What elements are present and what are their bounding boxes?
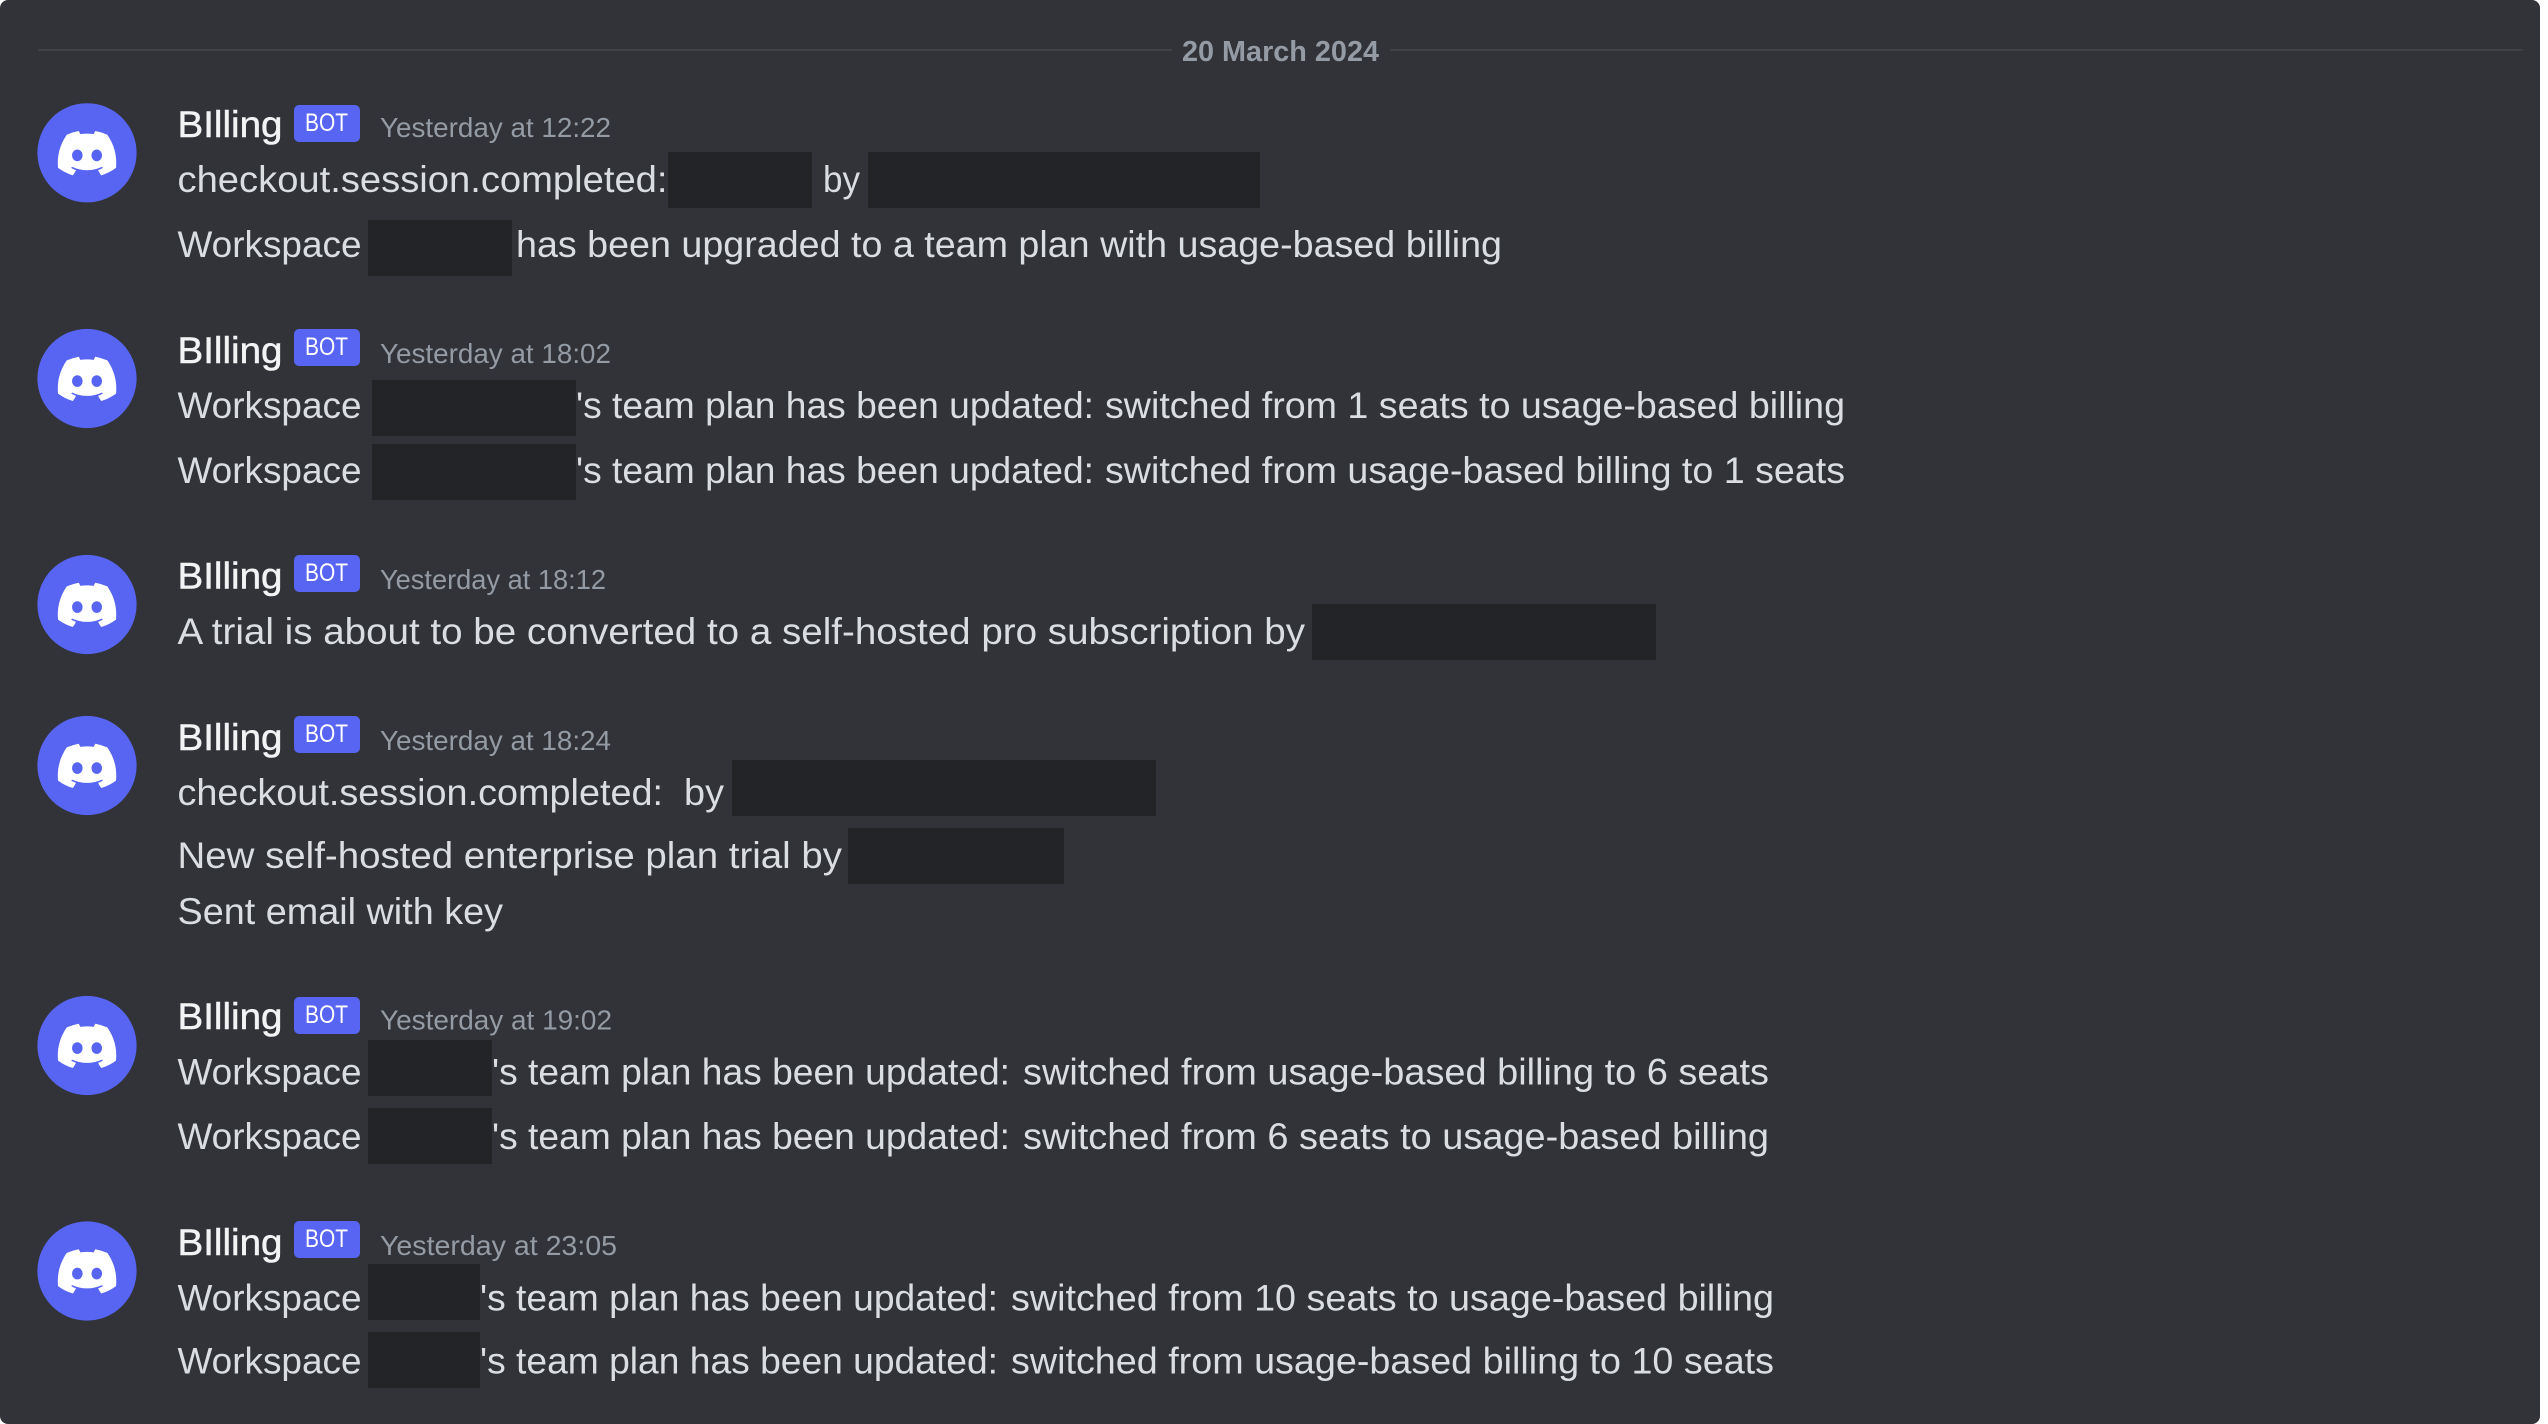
message text line 2: 's team plan has been updated:	[576, 450, 1094, 491]
timestamp: Yesterday at 12:22	[380, 112, 611, 143]
bot badge	[294, 1221, 360, 1258]
bot badge: BOT	[305, 333, 348, 361]
message text line 2: Workspace	[178, 1116, 362, 1157]
bot badge	[294, 555, 360, 592]
message 2	[37, 329, 1845, 500]
message 6	[37, 1221, 1774, 1388]
message text line 2	[178, 220, 1502, 276]
message text line 1	[178, 380, 1845, 436]
message text line 2: 's team plan has been updated:	[492, 1116, 1010, 1157]
message 3	[37, 555, 1656, 660]
sender name: BIlling	[178, 717, 282, 758]
timestamp: Yesterday at 18:02	[380, 338, 611, 369]
bot badge	[294, 105, 360, 142]
avatar: discord logo	[37, 329, 137, 428]
message text line 1: 's team plan has been updated:	[576, 385, 1094, 426]
message text line 2: switched from usage-based billing to 10 seats	[1011, 1340, 1774, 1382]
message text line 1	[178, 1040, 1769, 1096]
message text line 2	[178, 444, 1845, 500]
message text line 2: Workspace	[178, 1340, 362, 1382]
avatar: discord logo	[37, 555, 137, 654]
sender name: BIlling	[178, 104, 282, 145]
sender name: BIlling	[178, 330, 282, 371]
bot badge: BOT	[305, 720, 348, 748]
date divider label: 20 March 2024	[1182, 36, 1379, 68]
bot badge	[294, 329, 360, 366]
timestamp: Yesterday at 18:24	[380, 725, 611, 756]
avatar: discord logo	[37, 103, 137, 202]
bot badge: BOT	[305, 1225, 348, 1253]
message text line 1: Workspace	[178, 1278, 362, 1318]
message text line 2: 's team plan has been updated:	[480, 1340, 998, 1382]
message text line 2: Workspace	[178, 450, 362, 491]
sender name: BIlling	[178, 1222, 282, 1263]
message text line: A trial is about to be converted to a self-hosted pro subscription by	[178, 611, 1306, 652]
message text line	[178, 604, 1656, 660]
avatar: discord logo	[37, 996, 137, 1095]
bot badge: BOT	[305, 109, 348, 137]
message text line 1: checkout.session.completed: by	[178, 772, 725, 813]
message text line 2: Workspace	[178, 224, 362, 265]
bot badge: BOT	[305, 559, 348, 587]
timestamp: Yesterday at 18:12	[380, 564, 606, 595]
sender name: BIlling	[178, 556, 282, 596]
sender name: BIlling	[178, 996, 282, 1037]
avatar: discord logo	[37, 1221, 137, 1321]
message text line 2: New self-hosted enterprise plan trial by	[178, 835, 843, 876]
message text line 2: switched from usage-based billing to 1 seats	[1105, 450, 1845, 491]
message text line 1: Workspace	[178, 385, 362, 426]
message text line 1: 's team plan has been updated:	[480, 1278, 998, 1318]
bot badge	[294, 997, 360, 1034]
message text line 1: switched from 1 seats to usage-based billing	[1105, 385, 1845, 426]
avatar: discord logo	[37, 716, 137, 815]
message text line 1: checkout.session.completed:	[178, 159, 668, 200]
message text line 3: Sent email with key	[178, 891, 504, 932]
message text line 1: switched from usage-based billing to 6 seats	[1023, 1052, 1769, 1092]
message text line 2	[178, 828, 1064, 884]
message 4	[37, 716, 1156, 932]
message text line 1: 's team plan has been updated:	[492, 1052, 1010, 1092]
message text line 1: switched from 10 seats to usage-based billing	[1011, 1278, 1774, 1318]
message text line 1	[178, 152, 1260, 208]
message text line 2	[178, 1108, 1769, 1164]
timestamp: Yesterday at 19:02	[380, 1004, 612, 1036]
message 1	[37, 103, 1502, 276]
bot badge	[294, 716, 360, 753]
message text line 2	[178, 1332, 1774, 1388]
message text line 1	[178, 1264, 1774, 1320]
message text line 2: has been upgraded to a team plan with usage-based billing	[516, 224, 1502, 265]
message text line 1: Workspace	[178, 1052, 362, 1092]
bot badge: BOT	[305, 1001, 348, 1029]
message 5	[37, 996, 1769, 1164]
message text line 2: switched from 6 seats to usage-based billing	[1023, 1116, 1769, 1157]
message text line 1	[178, 760, 1156, 816]
message text line 1: by	[823, 159, 860, 200]
timestamp: Yesterday at 23:05	[380, 1230, 617, 1261]
